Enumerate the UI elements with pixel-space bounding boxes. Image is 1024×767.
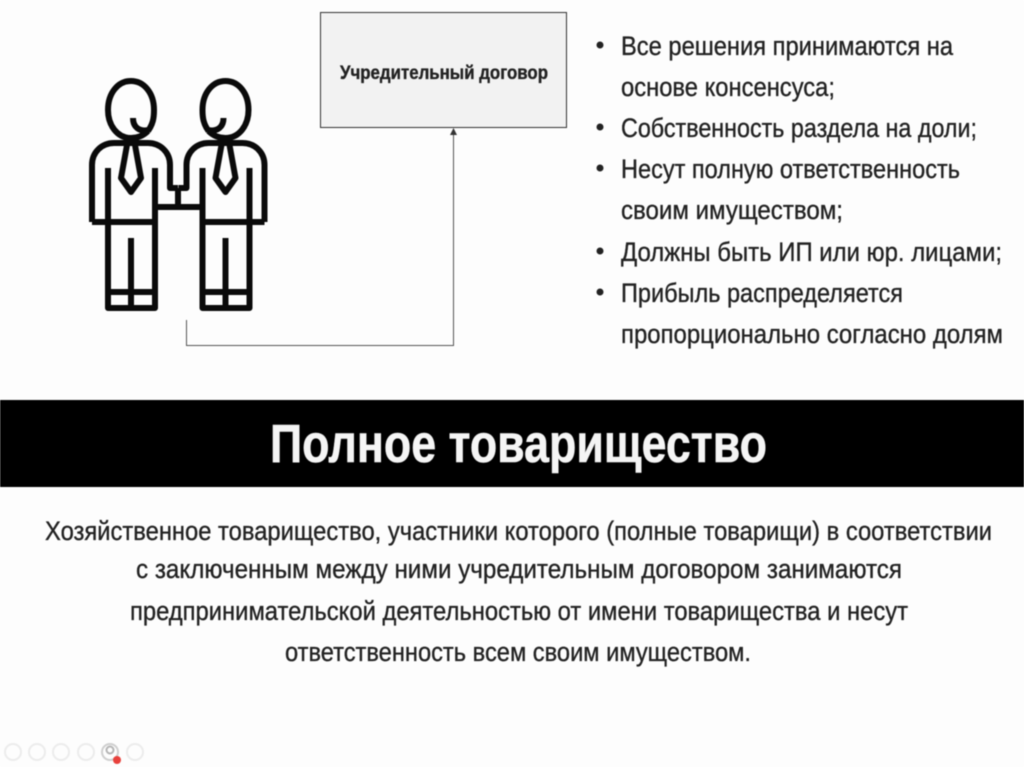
icon: clasped hands xyxy=(157,188,200,207)
definition text: ответственность всем своим имуществом. xyxy=(285,637,751,667)
bullet list: features of partnership: Прибыль распределяется xyxy=(621,278,903,308)
box: founding agreement: Учредительный договор xyxy=(340,63,548,84)
icon: left person xyxy=(92,81,178,308)
bullet list: features of partnership: Несут полную ответственность xyxy=(621,154,960,184)
bullet list: features of partnership xyxy=(596,31,1003,349)
laser pointer dot xyxy=(113,756,121,764)
definition text: предпринимательской деятельностью от имени товарищества и несут xyxy=(130,596,908,626)
icon: two business partners shaking hands xyxy=(92,81,264,308)
slideshow toolbar xyxy=(5,744,143,764)
title band xyxy=(0,400,1024,487)
arrow: connector from partners to founding agreement xyxy=(186,128,457,346)
box: founding agreement xyxy=(320,12,566,128)
bullet list: features of partnership: Собственность раздела на доли; xyxy=(621,113,977,143)
definition text: с заключенным между ними учредительным договором занимаются xyxy=(136,554,902,584)
bullet list: features of partnership: своим имуществом; xyxy=(621,195,843,225)
bullet markers xyxy=(596,42,604,296)
bullet list: features of partnership: основе консенсуса; xyxy=(621,72,835,102)
title band: Полное товарищество xyxy=(270,414,767,474)
definition text xyxy=(45,516,992,667)
bullet list: features of partnership: Все решения принимаются на xyxy=(621,31,954,61)
icon: right person xyxy=(178,81,264,308)
